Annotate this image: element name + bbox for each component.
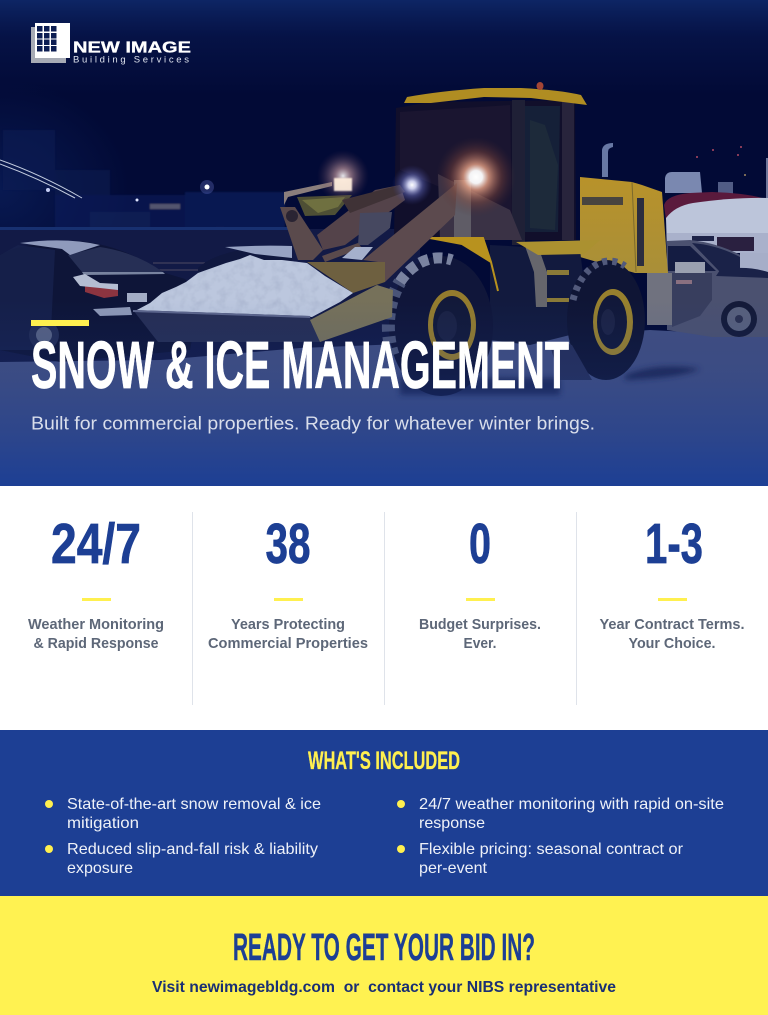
- stat: 24/7: 24/7: [51, 512, 141, 576]
- divider lines: [192, 512, 193, 705]
- panel: hero photo: [0, 0, 768, 486]
- blue wash over hero bottom: [0, 300, 768, 486]
- subtitle: Built for commercial properties. Ready for whatever winter brings.: [31, 414, 595, 434]
- lot backdrop: [0, 229, 420, 369]
- bucket inside: [307, 262, 385, 293]
- stat: 0: Budget Surprises.: [419, 616, 541, 633]
- bullet: slip and fall: exposure: [67, 860, 133, 877]
- panel: stats: [0, 486, 768, 730]
- cab: [394, 100, 576, 240]
- distant lights: [46, 146, 768, 202]
- bullet: weather monitoring: response: [419, 815, 485, 832]
- bullet: weather monitoring: 24/7 weather monitoring with rapid on-site: [419, 796, 724, 813]
- ground: [0, 330, 768, 486]
- far wheel tread: [550, 342, 592, 380]
- exhaust: [602, 143, 613, 177]
- stat: 1-3: Your Choice.: [628, 635, 716, 652]
- stat: 0: 0: [469, 512, 491, 576]
- stat: 24/7: Weather Monitoring: [28, 616, 164, 633]
- stat: 1-3: 1-3: [645, 512, 703, 576]
- panel: call to action: [0, 896, 768, 1015]
- stat: 38: Commercial Properties: [208, 635, 368, 652]
- parked car: middle: [198, 246, 292, 275]
- stat: 1-3: [600, 512, 744, 652]
- logo: NEW IMAGE: [73, 40, 191, 56]
- bullet: snow removal: [45, 796, 321, 832]
- bullet: snow removal: State-of-the-art snow removal & ice: [67, 796, 321, 813]
- loader shadows: [400, 367, 700, 395]
- white bus: [666, 198, 768, 253]
- bullet: snow removal: mitigation: [67, 815, 139, 832]
- railing: [153, 263, 205, 270]
- counterweight: [672, 273, 712, 327]
- stat: 1-3: Year Contract Terms.: [600, 616, 744, 633]
- lift arms: [280, 207, 323, 260]
- engine hood: [580, 177, 668, 273]
- light trails: [0, 160, 82, 198]
- bullet: slip and fall: Reduced slip-and-fall risk & liability: [67, 841, 318, 858]
- bullet: flexible pricing: per-event: [419, 860, 488, 877]
- section heading: WHAT'S INCLUDED: [308, 747, 460, 775]
- headlights: [436, 137, 516, 217]
- bullet: flexible pricing: [397, 841, 684, 877]
- fender: [430, 238, 498, 291]
- truck cab behind: [665, 172, 733, 197]
- stat: 38: Years Protecting: [231, 616, 345, 633]
- parked car: right: [667, 240, 768, 337]
- wheel loader: [133, 82, 712, 396]
- front wheel: [388, 256, 493, 396]
- bullet: flexible pricing: Flexible pricing: seasonal contract or: [419, 841, 684, 858]
- stat: 38: [208, 512, 368, 652]
- background buildings: [3, 130, 285, 230]
- bucket snow: [135, 255, 353, 317]
- rear wheel: [567, 260, 645, 380]
- accent bar: [31, 320, 89, 326]
- bucket: [133, 310, 320, 342]
- stat: 38: 38: [266, 512, 310, 576]
- stat: 24/7: [28, 512, 164, 652]
- CTA heading: READY TO GET YOUR BID IN?: [233, 927, 535, 969]
- parked car: left: [0, 240, 200, 362]
- logo window grid: [37, 26, 56, 52]
- red tank: [664, 192, 762, 220]
- stat: 0: [419, 512, 541, 652]
- panel: what's included: [0, 730, 768, 896]
- logo: [31, 23, 191, 66]
- logo: Building Services: [73, 54, 189, 66]
- bullet: slip and fall: [45, 841, 318, 877]
- mid frame: [490, 245, 590, 345]
- stat: 24/7: & Rapid Response: [34, 635, 158, 652]
- CTA text: Visit newimagebldg.com or contact your NIBS representative: [152, 979, 616, 996]
- stat: 0: Ever.: [464, 635, 496, 652]
- bullet: weather monitoring: [397, 796, 724, 832]
- loader frame with debris: [284, 182, 332, 205]
- cab roof: [404, 88, 587, 105]
